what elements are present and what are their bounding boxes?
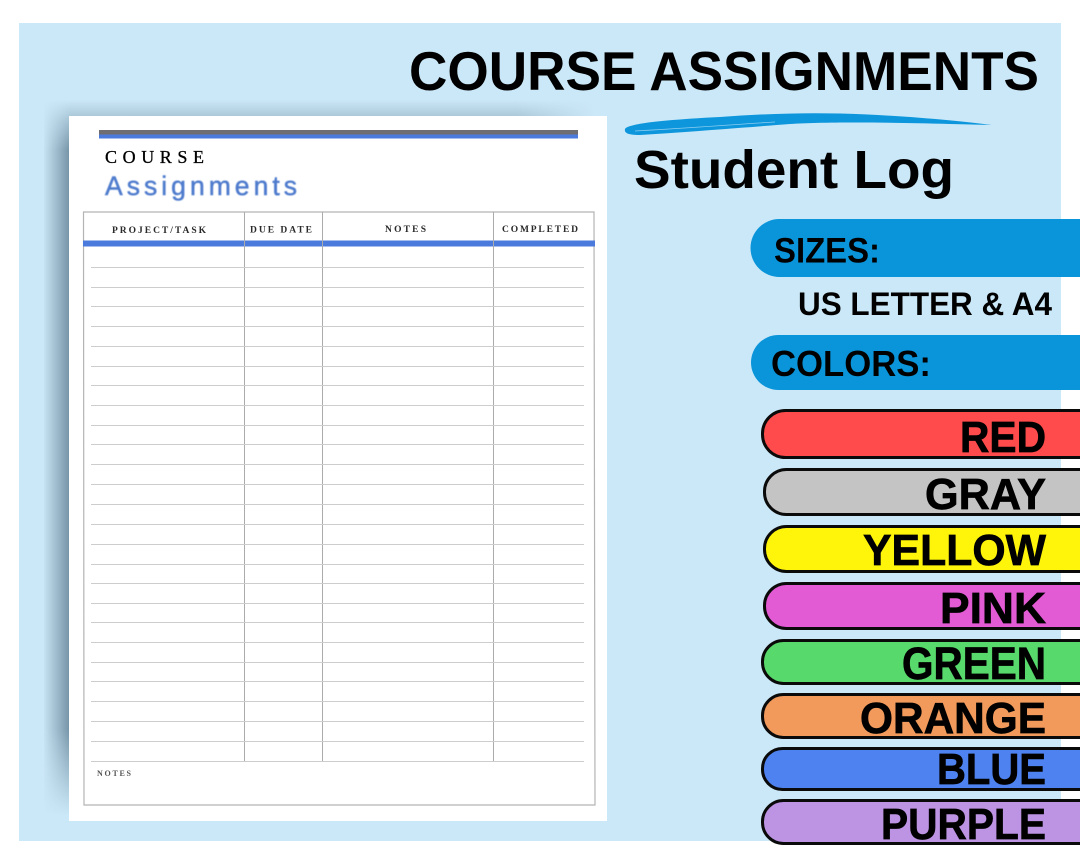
column headers: DUE DATE [250, 226, 312, 236]
color pill: orange [762, 694, 1080, 743]
colors banner: COLORS: [771, 343, 931, 384]
color pill: yellow: YELLOW [863, 526, 1046, 575]
color pill: orange: ORANGE [860, 694, 1046, 743]
subtitle: Student Log [634, 140, 954, 200]
color pill: red [762, 410, 1080, 462]
notes label: NOTES [97, 769, 132, 778]
sheet heading: Assignments: Assignments [105, 171, 297, 201]
colors banner [751, 335, 1080, 390]
color pill: blue: BLUE [937, 745, 1046, 794]
color pill: red: RED [960, 413, 1046, 462]
column headers: COMPLETED [502, 225, 578, 235]
sizes value: US LETTER & A4 [798, 286, 1052, 322]
header bars [99, 130, 578, 138]
column dividers [244, 212, 494, 762]
color pill: purple [762, 800, 1080, 849]
page shadow [44, 100, 595, 815]
color pill: blue [762, 745, 1080, 794]
sizes banner: SIZES: [774, 232, 880, 270]
color pill: pink [764, 584, 1080, 633]
planner sheet [69, 116, 607, 821]
title: COURSE ASSIGNMENTS [409, 40, 1039, 102]
assignments table [83, 212, 595, 805]
header rule [83, 240, 595, 246]
sizes banner [750, 219, 1080, 277]
column headers [112, 225, 578, 236]
column headers: NOTES [385, 225, 426, 235]
color pill: purple: PURPLE [881, 800, 1046, 849]
color pill: yellow [764, 526, 1080, 575]
row lines [91, 268, 584, 762]
color pill: green [762, 638, 1080, 689]
sheet heading: COURSE: COURSE [105, 147, 204, 167]
brush stroke underline [625, 113, 992, 135]
color pill: pink: PINK [940, 584, 1046, 633]
color pill: gray [764, 470, 1080, 519]
table outline [84, 212, 595, 805]
column headers: PROJECT/TASK [112, 226, 207, 236]
color pill: gray: GRAY [925, 470, 1046, 519]
color pill: green: GREEN [902, 638, 1046, 689]
